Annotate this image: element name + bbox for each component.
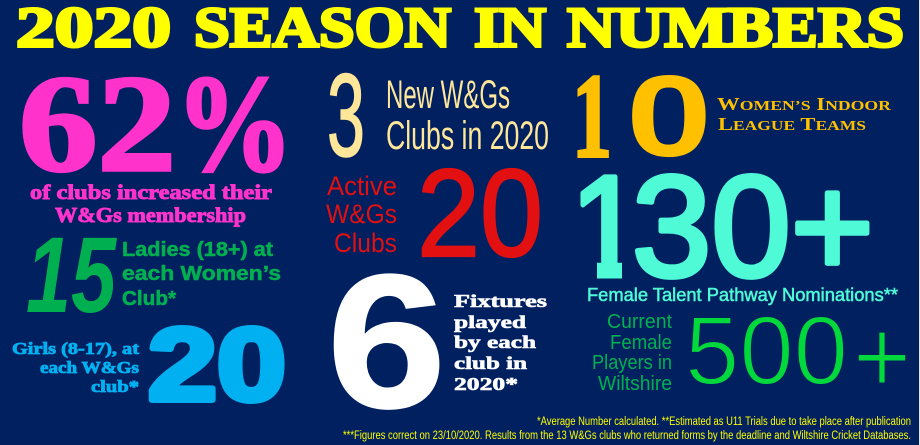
stat: 6 fixtures bbox=[327, 236, 547, 445]
caption: current female players: Players in bbox=[592, 352, 672, 374]
caption: current female players: Current bbox=[607, 311, 672, 333]
caption: current female players bbox=[592, 311, 672, 395]
stat: 500+ players bbox=[592, 296, 911, 416]
number: 62%: 62 bbox=[19, 47, 176, 200]
number: 62% bbox=[19, 47, 293, 200]
number: 130+: 30+ bbox=[632, 146, 874, 307]
caption: new clubs bbox=[386, 73, 549, 158]
caption: indoor league teams: W OMEN’S INDOOR bbox=[717, 94, 892, 114]
caption: active clubs: Clubs bbox=[334, 228, 397, 258]
caption: indoor league teams bbox=[717, 94, 892, 134]
number: 20: 20 bbox=[417, 145, 543, 283]
title bbox=[16, 0, 904, 60]
caption: ladies per women's club: Club* bbox=[122, 288, 176, 310]
caption: girls per club: club* bbox=[91, 377, 139, 396]
caption: indoor league teams: LEAGUE T EAMS bbox=[718, 114, 866, 134]
caption: fixtures played: by each bbox=[454, 332, 536, 352]
caption: clubs increased membership: W&Gs membership bbox=[55, 203, 246, 227]
number: 10: 1 bbox=[572, 50, 612, 184]
number: 6: 6 bbox=[327, 236, 446, 445]
number: 10 bbox=[572, 50, 712, 184]
footnotes bbox=[343, 416, 911, 442]
caption: ladies per women's club: Ladies (18+) at bbox=[122, 239, 273, 261]
caption: active clubs: W&Gs bbox=[326, 199, 397, 229]
stat: 20 girls bbox=[12, 307, 286, 422]
caption: ladies per women's club bbox=[122, 239, 281, 310]
number: 10: 0 bbox=[626, 51, 712, 181]
caption: fixtures played: club in bbox=[454, 353, 527, 373]
stat: 10 indoor teams bbox=[572, 50, 892, 184]
caption: fixtures played: played bbox=[454, 312, 526, 332]
caption: clubs increased membership bbox=[30, 180, 272, 227]
caption: active clubs bbox=[326, 171, 397, 258]
caption: ladies per women's club: each Women’s bbox=[122, 263, 281, 285]
number: 15: 15 bbox=[26, 214, 117, 335]
stat: 62% of clubs bbox=[19, 47, 293, 227]
caption: new clubs: New W&Gs bbox=[386, 73, 510, 117]
caption: fixtures played bbox=[454, 291, 547, 394]
caption: active clubs: Active bbox=[327, 171, 397, 201]
caption: girls per club: Girls (8-17), at bbox=[12, 339, 139, 358]
caption: current female players: Female bbox=[610, 332, 672, 354]
stat: 15 ladies bbox=[26, 214, 281, 335]
number: 3: 3 bbox=[327, 50, 365, 182]
caption: clubs increased membership: of clubs increased their bbox=[30, 180, 272, 204]
number: 20: 20 bbox=[148, 307, 286, 422]
stat: 130+ nominations bbox=[570, 146, 898, 307]
caption: girls per club: each W&Gs bbox=[40, 358, 139, 377]
caption: new clubs: Clubs in 2020 bbox=[386, 114, 549, 158]
number: 500+: + bbox=[853, 298, 911, 416]
stat: 20 active clubs bbox=[326, 145, 543, 283]
stat: 3 new clubs bbox=[327, 50, 549, 182]
caption: fixtures played: 2020* bbox=[454, 374, 518, 394]
number: 500+: 500 bbox=[685, 296, 848, 405]
caption: current female players: Wiltshire bbox=[598, 373, 672, 395]
caption: talent pathway: Female Talent Pathway Nominations** bbox=[587, 285, 898, 305]
caption: fixtures played: Fixtures bbox=[454, 291, 547, 311]
number: 500+ bbox=[685, 296, 911, 416]
number: 130+: 1 bbox=[570, 146, 644, 307]
number: 62%: % bbox=[176, 47, 293, 200]
caption: girls per club bbox=[12, 339, 139, 396]
